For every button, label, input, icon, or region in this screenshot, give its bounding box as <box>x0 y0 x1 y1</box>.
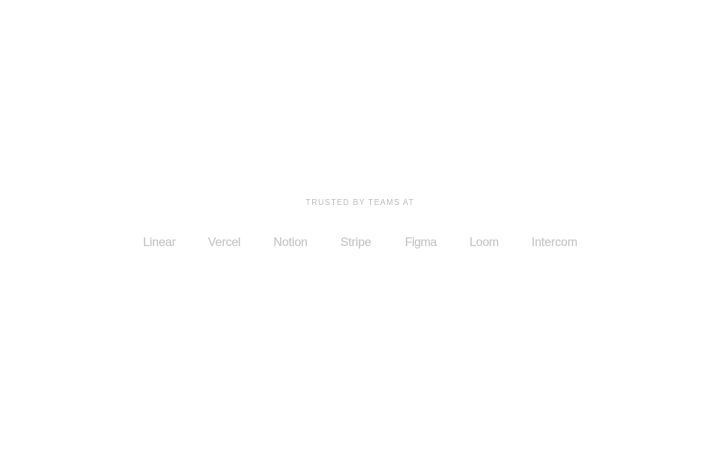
eyebrow heading: TRUSTED BY TEAMS AT <box>306 198 414 206</box>
company: Intercom: Intercom <box>532 235 577 249</box>
company: Notion: Notion <box>274 235 308 249</box>
company name row <box>143 235 577 249</box>
company: Linear: Linear <box>143 235 176 249</box>
company: Vercel: Vercel <box>208 235 241 249</box>
company: Figma: Figma <box>405 235 437 249</box>
company: Loom: Loom <box>470 235 499 249</box>
company: Stripe: Stripe <box>340 235 371 249</box>
